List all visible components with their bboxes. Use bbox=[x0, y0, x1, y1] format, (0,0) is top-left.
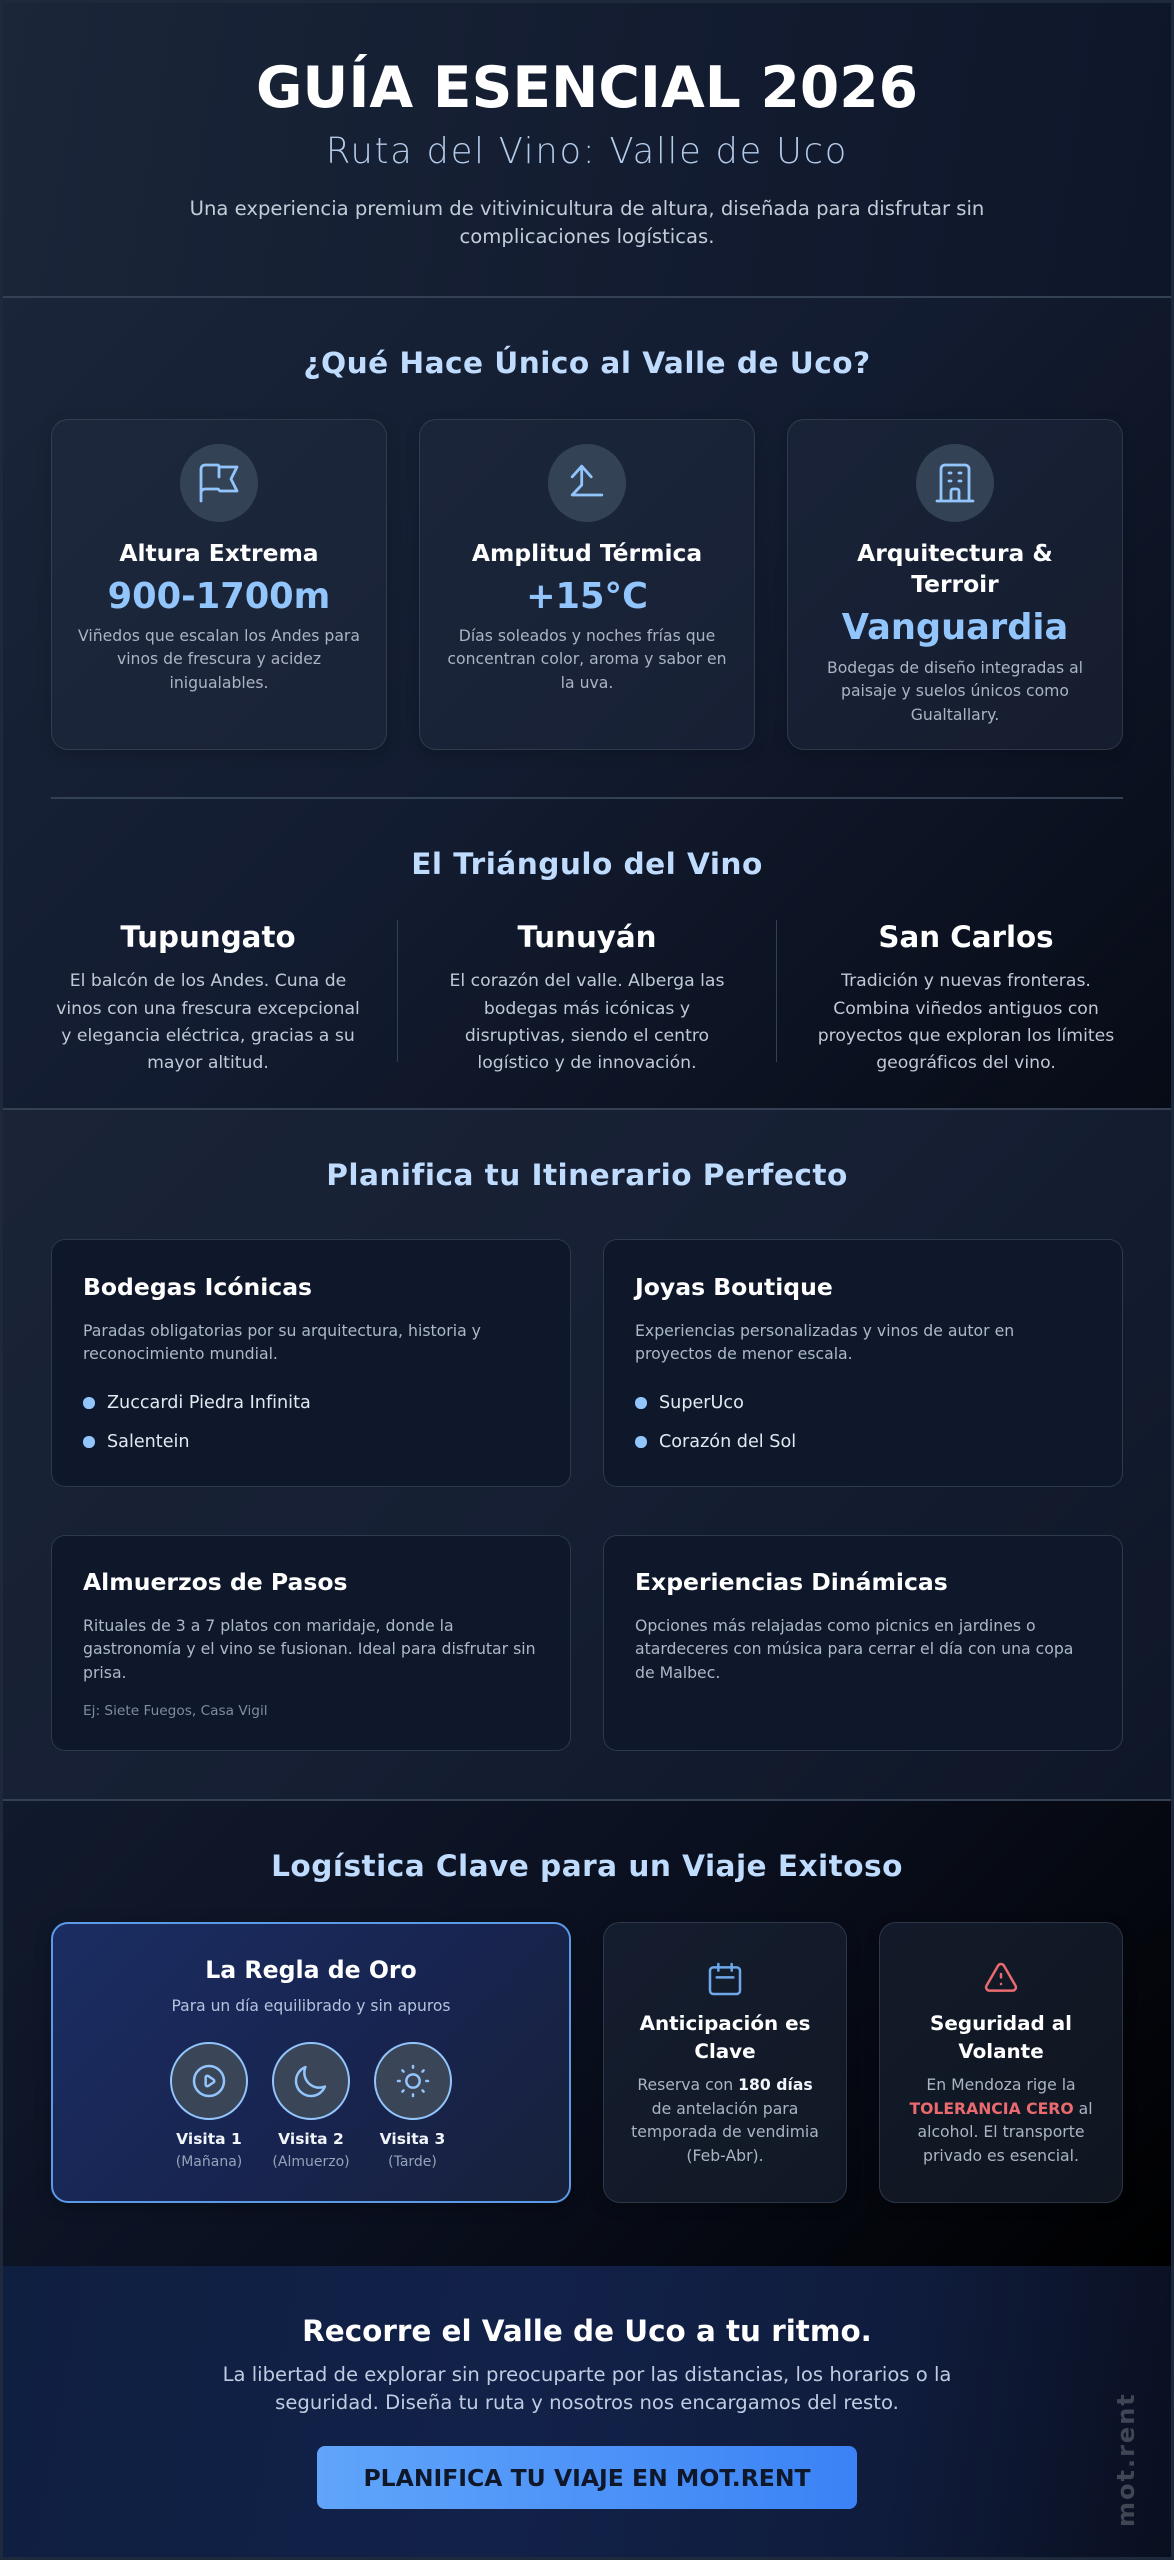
card title bbox=[930, 2012, 1072, 2063]
card text: (Feb-Abr). bbox=[686, 2146, 764, 2165]
icon: sun bbox=[374, 2042, 452, 2120]
card text: proyectos de menor escala. bbox=[635, 1344, 853, 1363]
panel subtitle: Para un día equilibrado y sin apuros bbox=[172, 1997, 450, 2015]
column title: Tunuyán bbox=[517, 920, 657, 954]
icon: flag bbox=[180, 444, 258, 522]
visit 1 time: (Mañana) bbox=[176, 2154, 242, 2170]
card title: Almuerzos de Pasos bbox=[83, 1568, 348, 1596]
card text: Reserva con 180 días bbox=[637, 2075, 813, 2094]
section: logistics bbox=[0, 1801, 1174, 2266]
card title: Bodegas Icónicas bbox=[83, 1273, 312, 1301]
card: architecture bbox=[787, 419, 1123, 750]
column: Tupungato bbox=[56, 920, 360, 1073]
card text: reconocimiento mundial. bbox=[83, 1344, 278, 1363]
visit 2 time: (Almuerzo) bbox=[272, 2154, 350, 2170]
column title: Tupungato bbox=[120, 920, 296, 954]
column text: vinos con una frescura excepcional bbox=[56, 999, 360, 1019]
subtitle: Ruta del Vino: Valle de Uco bbox=[326, 131, 848, 172]
card title: Joyas Boutique bbox=[635, 1273, 833, 1301]
stat value: 900-1700m bbox=[108, 576, 330, 617]
list label: Salentein bbox=[107, 1432, 190, 1452]
panel: golden rule bbox=[51, 1922, 571, 2203]
CTA text: La libertad de explorar sin preocuparte por las distancias, los horarios o la bbox=[223, 2363, 951, 2386]
card text bbox=[909, 2075, 1093, 2165]
visit 3 time: (Tarde) bbox=[388, 2154, 437, 2170]
intro text bbox=[190, 197, 984, 248]
card text bbox=[635, 1321, 1014, 1363]
card text: gastronomía y el vino se fusionan. Ideal para disfrutar sin bbox=[83, 1639, 536, 1658]
column: Tunuyán bbox=[450, 920, 724, 1073]
stat value: Vanguardia bbox=[842, 607, 1068, 648]
visit 1 label: Visita 1 bbox=[176, 2130, 242, 2148]
watermark: mot.rent bbox=[1112, 2392, 1140, 2527]
card: altitude bbox=[51, 419, 387, 750]
card description: concentran color, aroma y sabor en bbox=[447, 649, 727, 668]
icon: building bbox=[916, 444, 994, 522]
header section bbox=[0, 0, 1174, 298]
card description: la uva. bbox=[561, 673, 613, 692]
icon: arrow up bbox=[548, 444, 626, 522]
card title: Arquitectura & bbox=[857, 539, 1053, 567]
column text: El balcón de los Andes. Cuna de bbox=[70, 971, 346, 991]
card text: Experiencias personalizadas y vinos de autor en bbox=[635, 1321, 1014, 1340]
card: tasting lunches bbox=[51, 1535, 571, 1751]
card text bbox=[631, 2075, 819, 2165]
column text: geográficos del vino. bbox=[876, 1053, 1056, 1073]
list item bbox=[83, 1436, 94, 1448]
section: itinerary bbox=[0, 1110, 1174, 1801]
card text: Opciones más relajadas como picnics en jardines o bbox=[635, 1616, 1036, 1635]
list item bbox=[83, 1397, 94, 1408]
card: road safety bbox=[879, 1922, 1123, 2203]
CTA text: seguridad. Diseña tu ruta y nosotros nos encargamos del resto. bbox=[275, 2390, 899, 2414]
CTA button: PLANIFICA TU VIAJE EN MOT.RENT bbox=[363, 2464, 811, 2492]
card description bbox=[827, 658, 1083, 724]
title: GUÍA ESENCIAL 2026 bbox=[256, 55, 918, 121]
panel title: La Regla de Oro bbox=[205, 1956, 417, 1984]
card title bbox=[640, 2012, 810, 2063]
icon: moon bbox=[272, 2042, 350, 2120]
card title: Altura Extrema bbox=[119, 539, 319, 567]
card description: paisaje y suelos únicos como bbox=[841, 681, 1069, 700]
list label: Zuccardi Piedra Infinita bbox=[107, 1393, 311, 1413]
icon: calendar bbox=[708, 1962, 742, 1996]
column text: Tradición y nuevas fronteras. bbox=[841, 971, 1091, 991]
card: thermal range bbox=[419, 419, 755, 750]
intro text: Una experiencia premium de vitivinicultura de altura, diseñada para disfrutar sin bbox=[190, 197, 984, 220]
CTA button bbox=[317, 2446, 857, 2509]
card text bbox=[83, 1616, 536, 1682]
card description: Viñedos que escalan los Andes para bbox=[78, 626, 360, 645]
card description bbox=[78, 626, 360, 692]
card text: En Mendoza rige la bbox=[926, 2075, 1076, 2094]
list item bbox=[635, 1436, 646, 1448]
card title: Experiencias Dinámicas bbox=[635, 1568, 948, 1596]
example note: Ej: Siete Fuegos, Casa Vigil bbox=[83, 1703, 268, 1719]
card text: atardeceres con música para cerrar el día con una copa bbox=[635, 1639, 1073, 1658]
section: what makes the valley unique and wine triangle bbox=[0, 298, 1174, 1110]
list label: Corazón del Sol bbox=[659, 1432, 796, 1452]
section: call to action bbox=[0, 2266, 1174, 2560]
stat value: +15°C bbox=[526, 576, 648, 617]
card title: Volante bbox=[958, 2040, 1044, 2063]
column text: y elegancia eléctrica, gracias a su bbox=[61, 1026, 355, 1046]
visit 3 label: Visita 3 bbox=[380, 2130, 445, 2148]
card description: vinos de frescura y acidez bbox=[117, 649, 321, 668]
heading: wine triangle: El Triángulo del Vino bbox=[411, 847, 763, 881]
card description: Días soleados y noches frías que bbox=[459, 626, 715, 645]
column title: San Carlos bbox=[878, 920, 1054, 954]
card title: Amplitud Térmica bbox=[472, 539, 702, 567]
column text: logístico y de innovación. bbox=[477, 1053, 697, 1073]
card text: TOLERANCIA CERO al bbox=[909, 2099, 1093, 2118]
card text: Paradas obligatorias por su arquitectura, historia y bbox=[83, 1321, 481, 1340]
card text: de Malbec. bbox=[635, 1663, 720, 1682]
card text: alcohol. El transporte bbox=[918, 2122, 1084, 2141]
card title bbox=[857, 539, 1053, 598]
CTA title: Recorre el Valle de Uco a tu ritmo. bbox=[302, 2314, 872, 2348]
heading: logistics: Logística Clave para un Viaje Exitoso bbox=[271, 1849, 903, 1883]
card text bbox=[635, 1616, 1073, 1682]
card text: privado es esencial. bbox=[923, 2146, 1079, 2165]
card: booking ahead bbox=[603, 1922, 847, 2203]
list item bbox=[635, 1397, 646, 1408]
card: dynamic experiences bbox=[603, 1535, 1123, 1751]
heading: itinerary: Planifica tu Itinerario Perfecto bbox=[326, 1158, 848, 1192]
card text: de antelación para bbox=[652, 2099, 798, 2118]
card description: Bodegas de diseño integradas al bbox=[827, 658, 1083, 677]
column text bbox=[450, 971, 724, 1073]
card description: inigualables. bbox=[170, 673, 268, 692]
card text: Rituales de 3 a 7 platos con maridaje, donde la bbox=[83, 1616, 454, 1635]
heading: unique: ¿Qué Hace Único al Valle de Uco? bbox=[303, 346, 871, 380]
card title: Clave bbox=[694, 2040, 756, 2063]
column text: bodegas más icónicas y bbox=[484, 999, 690, 1019]
icon: warning bbox=[984, 1962, 1018, 1992]
card title: Terroir bbox=[911, 570, 999, 598]
column: San Carlos bbox=[818, 920, 1114, 1073]
column text: Combina viñedos antiguos con bbox=[833, 999, 1099, 1019]
card: iconic wineries bbox=[51, 1239, 571, 1487]
column text bbox=[56, 971, 360, 1073]
card title: Anticipación es bbox=[640, 2012, 810, 2035]
column text bbox=[818, 971, 1114, 1073]
card title: Seguridad al bbox=[930, 2012, 1072, 2035]
CTA text bbox=[223, 2363, 951, 2414]
column text: disruptivas, siendo el centro bbox=[465, 1026, 709, 1046]
card: boutique gems bbox=[603, 1239, 1123, 1487]
list label: SuperUco bbox=[659, 1393, 744, 1413]
column text: proyectos que exploran los límites bbox=[818, 1026, 1114, 1046]
card description bbox=[447, 626, 727, 692]
column text: mayor altitud. bbox=[147, 1053, 269, 1073]
icon: play bbox=[170, 2042, 248, 2120]
column text: El corazón del valle. Alberga las bbox=[450, 971, 724, 991]
card text: prisa. bbox=[83, 1663, 127, 1682]
card description: Gualtallary. bbox=[911, 705, 999, 724]
visit 2 label: Visita 2 bbox=[278, 2130, 344, 2148]
card text: temporada de vendimia bbox=[631, 2122, 819, 2141]
intro text: complicaciones logísticas. bbox=[460, 225, 714, 248]
card text bbox=[83, 1321, 481, 1363]
